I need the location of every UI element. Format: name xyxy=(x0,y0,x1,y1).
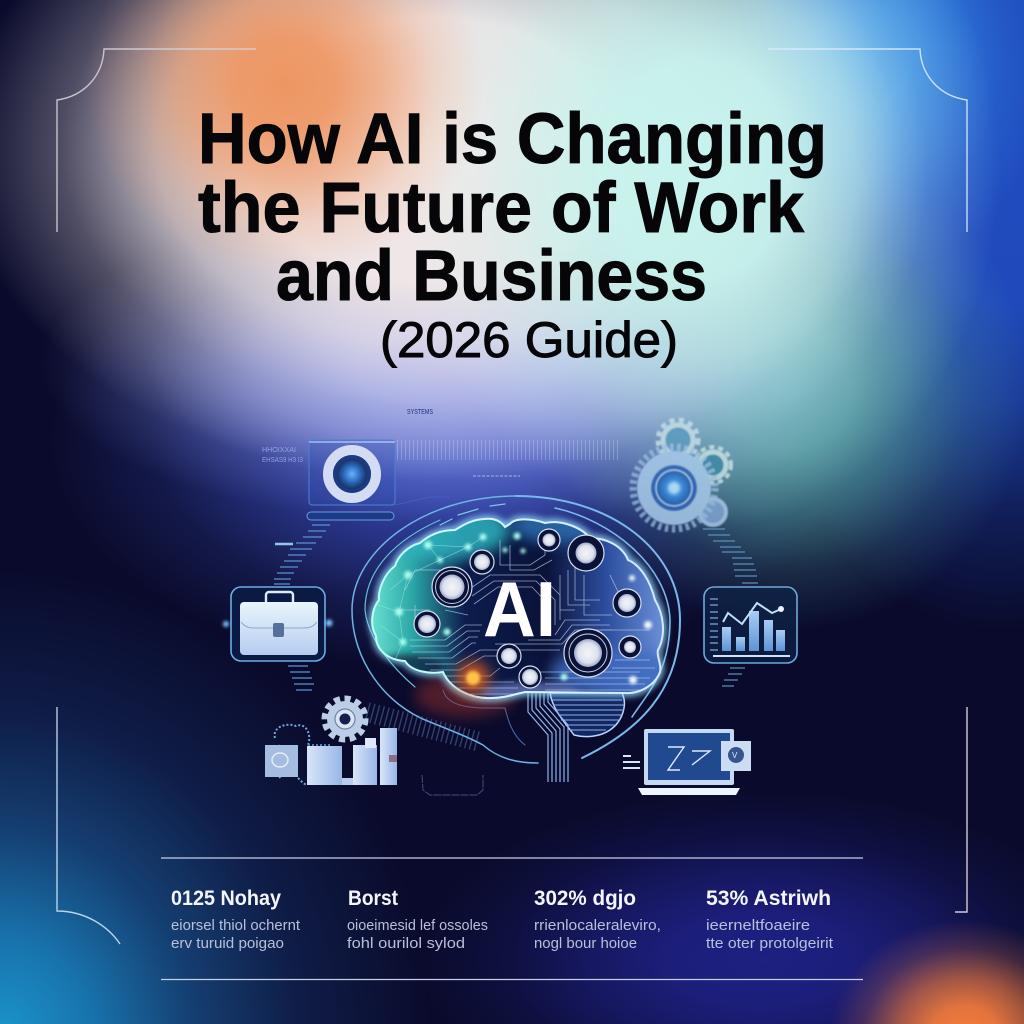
stat: Borst xyxy=(347,887,488,952)
stat: 0125 Nohay: 0125 Nohay xyxy=(171,887,281,910)
stat: 0125 Nohay: erv turuid poigao xyxy=(171,935,284,952)
icon: gears cluster xyxy=(633,420,731,529)
orange glow spot xyxy=(457,662,489,694)
stat: Borst: Borst xyxy=(348,887,398,910)
icon: laptop with card xyxy=(623,729,751,795)
icon: camera monitor panel: HHOIXXAI xyxy=(262,447,296,454)
brain outline xyxy=(372,519,663,698)
stat: 53% Astriwh: 53% Astriwh xyxy=(706,887,831,910)
icon: camera monitor panel xyxy=(262,440,620,520)
brain stem circuit lines xyxy=(528,693,568,782)
icon: briefcase panel xyxy=(223,587,332,661)
title: How AI is Changing xyxy=(198,100,827,179)
corner bracket: top left xyxy=(57,49,256,232)
AI label: AI xyxy=(483,565,556,653)
title: and Business xyxy=(276,237,707,316)
icon: AI brain xyxy=(370,500,690,782)
stat: 53% Astriwh xyxy=(706,887,834,952)
stats divider bottom xyxy=(161,978,863,980)
decorative tick band under ring xyxy=(367,712,480,742)
brain colour overlays and circuits xyxy=(378,520,660,698)
stat: 0125 Nohay: eiorsel thiol ochernt xyxy=(171,917,301,934)
brain lower lobe xyxy=(550,693,624,737)
teal and blue node dots xyxy=(395,532,652,684)
title xyxy=(198,100,827,368)
stats divider top xyxy=(161,857,863,859)
stat: Borst: oioeimesid lef ossoles xyxy=(347,917,488,934)
decorative orbit rings around brain xyxy=(352,496,680,763)
small caption above diagram: SYSTEMS xyxy=(407,409,433,416)
stat: 53% Astriwh: ieerneltfoaeire xyxy=(706,917,810,934)
stat: 302% dgjo: rrienlocaleraleviro, xyxy=(534,917,661,934)
corner bracket: bottom left xyxy=(57,707,120,944)
stat: 53% Astriwh: tte oter protolgeirit xyxy=(706,935,834,952)
title: the Future of Work xyxy=(198,169,804,248)
connector: stepped data lines right xyxy=(703,529,758,686)
circuit nodes xyxy=(414,529,641,688)
stat: 302% dgjo: 302% dgjo xyxy=(534,887,636,910)
stat: 0125 Nohay xyxy=(171,887,301,952)
connector: stepped data lines left xyxy=(274,525,330,690)
icon: camera monitor panel: EHSAS9 H3 I3 xyxy=(262,457,303,464)
dashed bracket under brain xyxy=(422,775,483,795)
stat: 302% dgjo xyxy=(534,887,661,952)
title: (2026 Guide) xyxy=(380,312,678,368)
stat: Borst: fohl ourilol sylod xyxy=(347,935,465,952)
brain outline glow xyxy=(372,519,663,698)
brain body xyxy=(372,519,663,698)
corner bracket: bottom right xyxy=(955,707,967,912)
icon: bar chart panel xyxy=(704,587,797,663)
icon: laptop with card: V xyxy=(732,751,738,760)
corner bracket: top right xyxy=(768,49,967,232)
stat: 302% dgjo: nogl bour hoioe xyxy=(534,935,637,952)
icon: gear and buildings xyxy=(265,699,397,785)
